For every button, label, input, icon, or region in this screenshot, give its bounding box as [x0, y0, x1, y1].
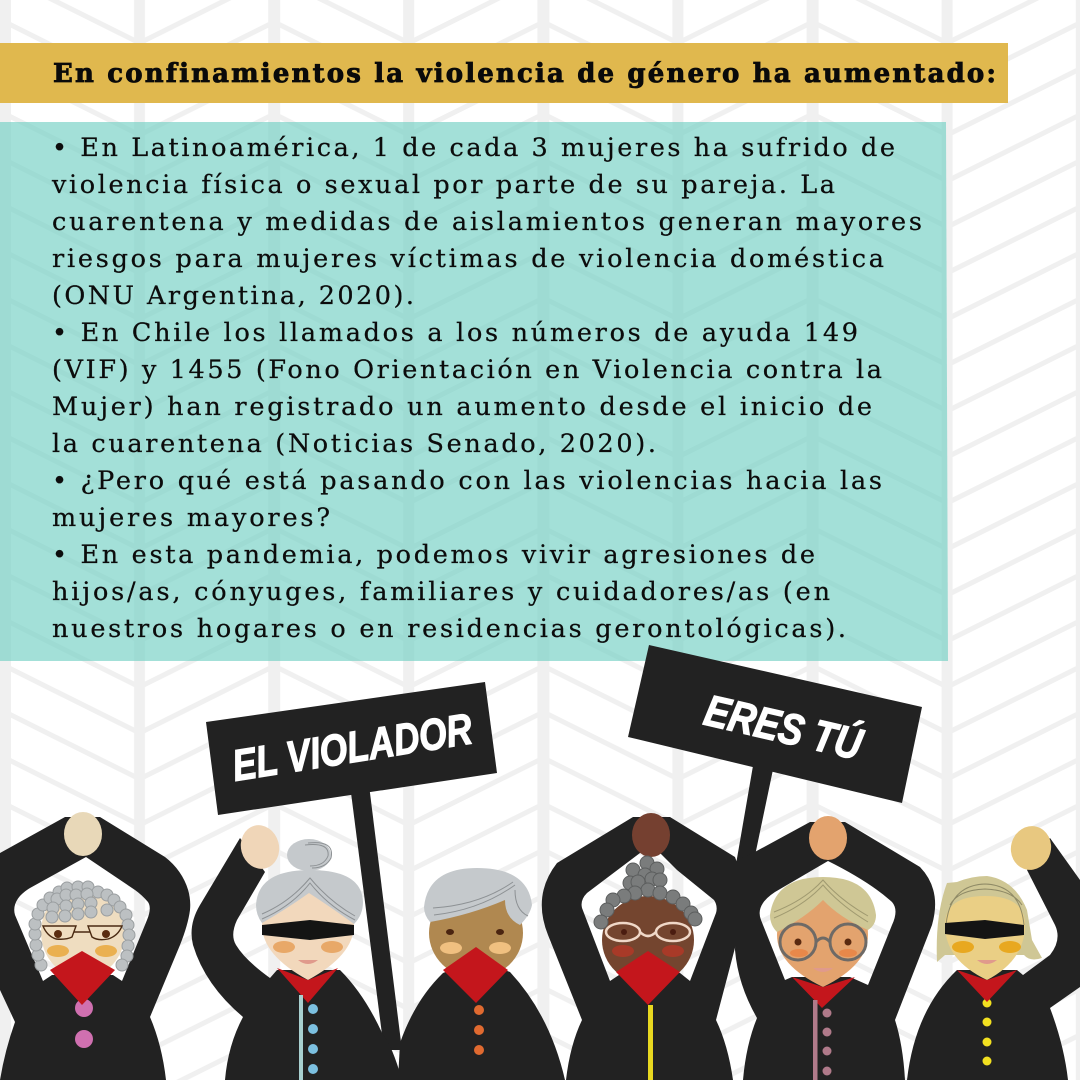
body text: • ¿Pero qué está pasando con las violencias hacia las [52, 466, 882, 496]
body text: (ONU Argentina, 2020). [52, 281, 414, 311]
buttons [75, 999, 93, 1048]
cheeks [47, 945, 117, 957]
eyes [794, 938, 852, 946]
body text: la cuarentena (Noticias Senado, 2020). [52, 429, 656, 459]
hair strands [262, 878, 355, 920]
body text: (VIF) y 1455 (Fono Orientación en Violencia contra la [52, 355, 882, 385]
scarf [277, 968, 338, 1003]
hair [770, 877, 876, 932]
scarf [616, 951, 680, 1005]
body text: nuestros hogares o en residencias gerontológicas). [52, 614, 846, 644]
body text: mujeres mayores? [52, 503, 330, 533]
face [262, 890, 354, 980]
hand [809, 816, 847, 860]
scarf [792, 977, 855, 1008]
body text: Mujer) han registrado un aumento desde el inicio de [52, 392, 872, 422]
cheeks [952, 941, 1021, 953]
blindfold [945, 920, 1024, 939]
hair strands [433, 882, 528, 916]
body text: riesgos para mujeres víctimas de violencia doméstica [52, 244, 884, 274]
hand [632, 813, 670, 857]
hair [256, 870, 363, 924]
blindfold [262, 920, 354, 940]
hair [424, 868, 532, 925]
stripe [813, 1000, 818, 1080]
glasses [780, 924, 866, 960]
face [429, 888, 523, 978]
cheeks [790, 949, 857, 957]
hair strands [946, 884, 1024, 925]
hand [64, 812, 102, 856]
buttons [822, 1008, 832, 1076]
stripe [648, 1005, 653, 1080]
figure 6: blonde woman with blindfold [907, 822, 1080, 1080]
eyes [446, 929, 504, 935]
body text [51, 133, 922, 644]
buttons [308, 1004, 318, 1074]
hand [236, 821, 284, 873]
mouth [813, 968, 833, 972]
sign text: EL VIOLADOR [229, 705, 476, 791]
bun [287, 839, 332, 871]
title: En confinamientos la violencia de género ha aumentado: [53, 59, 996, 89]
buttons [474, 1005, 484, 1055]
face [602, 896, 694, 984]
figure 4: woman with grey curls and white glasses [542, 813, 743, 1080]
sign: el violador [206, 682, 497, 1050]
face [945, 896, 1025, 980]
panel: text [0, 122, 948, 661]
buttons [982, 998, 992, 1066]
hand [1006, 822, 1056, 874]
body text: hijos/as, cónyuges, familiares y cuidadores/as (en [52, 577, 830, 607]
figure 1: woman with curly wig [0, 812, 190, 1080]
stripe [299, 995, 303, 1080]
body text: cuarentena y medidas de aislamientos generan mayores [52, 207, 922, 237]
cheeks [440, 942, 511, 954]
body text: • En Chile los llamados a los números de ayuda 149 [52, 318, 858, 348]
title banner [0, 43, 1008, 103]
body text: • En esta pandemia, podemos vivir agresiones de [52, 540, 815, 570]
figure 3: woman with short grey hair [398, 868, 565, 1080]
eyes [621, 929, 676, 935]
scarf [50, 951, 115, 1005]
figure 5: woman with round glasses [735, 816, 935, 1080]
body text: violencia física o sexual por parte de su pareja. La [51, 170, 835, 200]
mouth [977, 960, 997, 964]
mouth [298, 960, 318, 964]
wig curls [29, 881, 135, 971]
body text: • En Latinoamérica, 1 de cada 3 mujeres ha sufrido de [52, 133, 895, 163]
face [777, 895, 868, 987]
sign text: ERES TÚ [700, 685, 868, 770]
hair strands [774, 880, 868, 922]
sign: eres tú [628, 645, 922, 870]
cheeks [273, 941, 343, 953]
glasses [606, 923, 690, 941]
scarf [957, 970, 1017, 1002]
figure 2: woman with bun and blindfold [192, 821, 402, 1080]
hair back [937, 876, 1042, 962]
scarf [443, 947, 508, 1003]
face [41, 886, 125, 978]
hair curls [594, 856, 702, 929]
glasses and eyes [43, 926, 122, 940]
cheeks [612, 945, 684, 957]
